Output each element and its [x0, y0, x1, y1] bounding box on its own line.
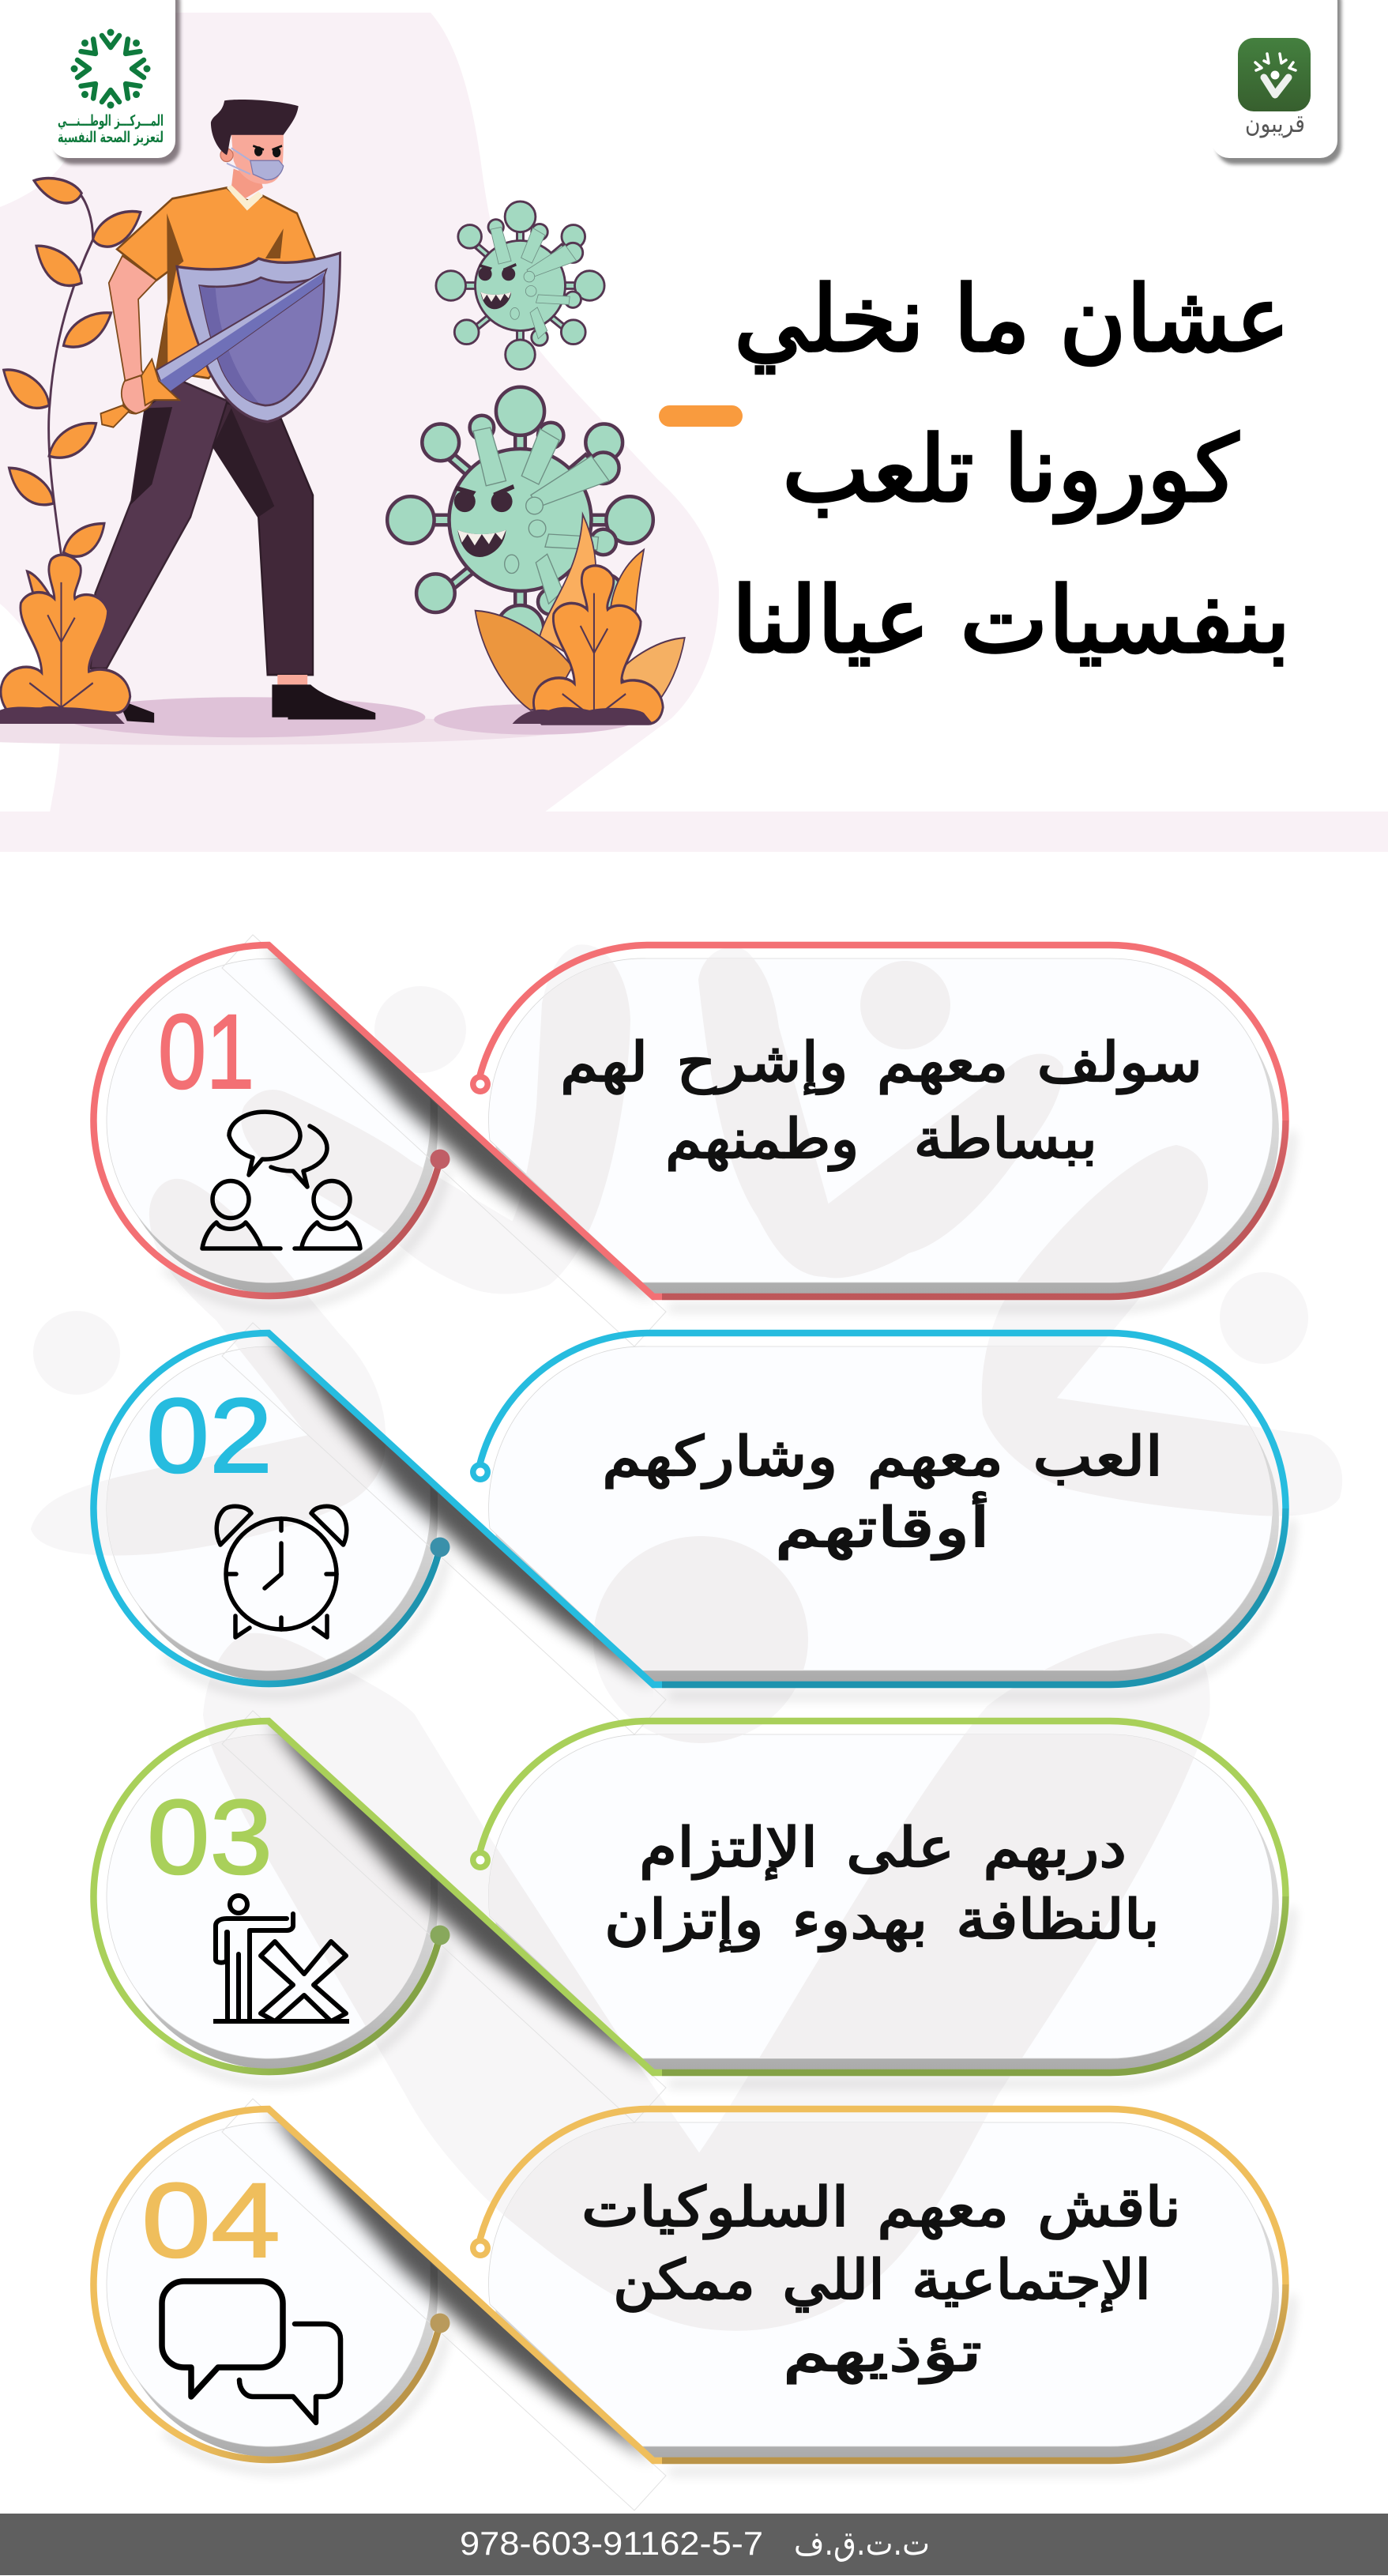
app name: قريبون	[1245, 110, 1305, 138]
footer bar	[0, 2514, 1388, 2575]
header pink blob background	[0, 13, 1388, 852]
number: 02	[146, 1377, 273, 1495]
ISBN label: ت.ت.ق.ف	[794, 2524, 930, 2563]
accent orange pill	[659, 405, 743, 427]
sword	[100, 269, 326, 427]
tip text	[560, 1031, 1202, 1171]
shield	[177, 253, 340, 422]
outline ring	[93, 1333, 1285, 1685]
icon: two people talking	[202, 1112, 360, 1248]
man head	[211, 100, 299, 211]
card: qareebon app logo	[1212, 0, 1341, 164]
left bush	[0, 555, 130, 724]
tip text: دربهم على الإلتزام	[639, 1817, 1127, 1880]
tip text: سولف معهم وإشرح لهم	[560, 1031, 1202, 1094]
logo text: المـــركـــز الوطـــنـــي	[58, 112, 164, 130]
panel: tip 04	[90, 2099, 1297, 2511]
background watermark shapes	[32, 945, 1341, 2330]
tip text: أوقاتهم	[775, 1492, 990, 1560]
tip text: الإجتماعية اللي ممكن	[613, 2249, 1151, 2312]
icon: alarm clock	[216, 1506, 347, 1637]
soft shadows	[164, 1132, 1292, 1308]
tip text: تؤذيهم	[783, 2321, 982, 2384]
man shoes	[118, 675, 375, 723]
right bush	[476, 514, 685, 724]
virus large	[387, 387, 653, 652]
soft shadows	[164, 2295, 1292, 2472]
panel: tip 03	[90, 1710, 1297, 2464]
man arm	[109, 256, 156, 413]
logo text	[58, 112, 164, 146]
soft shadows	[164, 1908, 1292, 2084]
tip text: بالنظافة بهدوء وإتزان	[604, 1889, 1160, 1952]
title: بنفسيات عيالنا	[732, 567, 1291, 674]
plants and man	[0, 100, 685, 724]
title: عشان ما نخلي	[734, 266, 1290, 374]
ground shadows	[0, 697, 636, 745]
tip text	[604, 1817, 1160, 1952]
title: كورونا تلعب	[782, 416, 1239, 524]
man trousers	[91, 381, 313, 675]
tip text: ناقش معهم السلوكيات	[581, 2176, 1181, 2239]
tip text: العب معهم وشاركهم	[602, 1425, 1163, 1489]
icon: chat bubbles	[162, 2281, 340, 2423]
icon: app square	[1238, 38, 1311, 111]
ISBN number: 978-603-91162-5-7	[460, 2525, 763, 2562]
tip text	[581, 2176, 1181, 2384]
card: national centre logo	[51, 0, 180, 164]
outline ring	[93, 945, 1285, 1297]
virus small	[436, 201, 604, 370]
number: 04	[141, 2162, 280, 2280]
panel: tip 02	[90, 1323, 1297, 2464]
number: 03	[147, 1779, 273, 1896]
man shirt	[117, 188, 315, 378]
icon: person with X sign	[213, 1896, 349, 2021]
outline ring	[93, 1721, 1285, 2073]
tip text: ببساطة وطمنهم	[665, 1108, 1097, 1171]
plant stem with leaves	[4, 179, 141, 597]
title	[732, 266, 1291, 674]
outline ring	[93, 2109, 1285, 2461]
panel: tip 01	[32, 935, 1341, 2330]
tip text	[602, 1425, 1163, 1560]
icon: star of people	[71, 28, 150, 109]
hero illustration: man, plants, viruses	[0, 100, 685, 745]
logo text: لتعزيز الصحة النفسية	[58, 129, 164, 146]
number: 01	[158, 993, 254, 1111]
soft shadows	[164, 1520, 1292, 1696]
